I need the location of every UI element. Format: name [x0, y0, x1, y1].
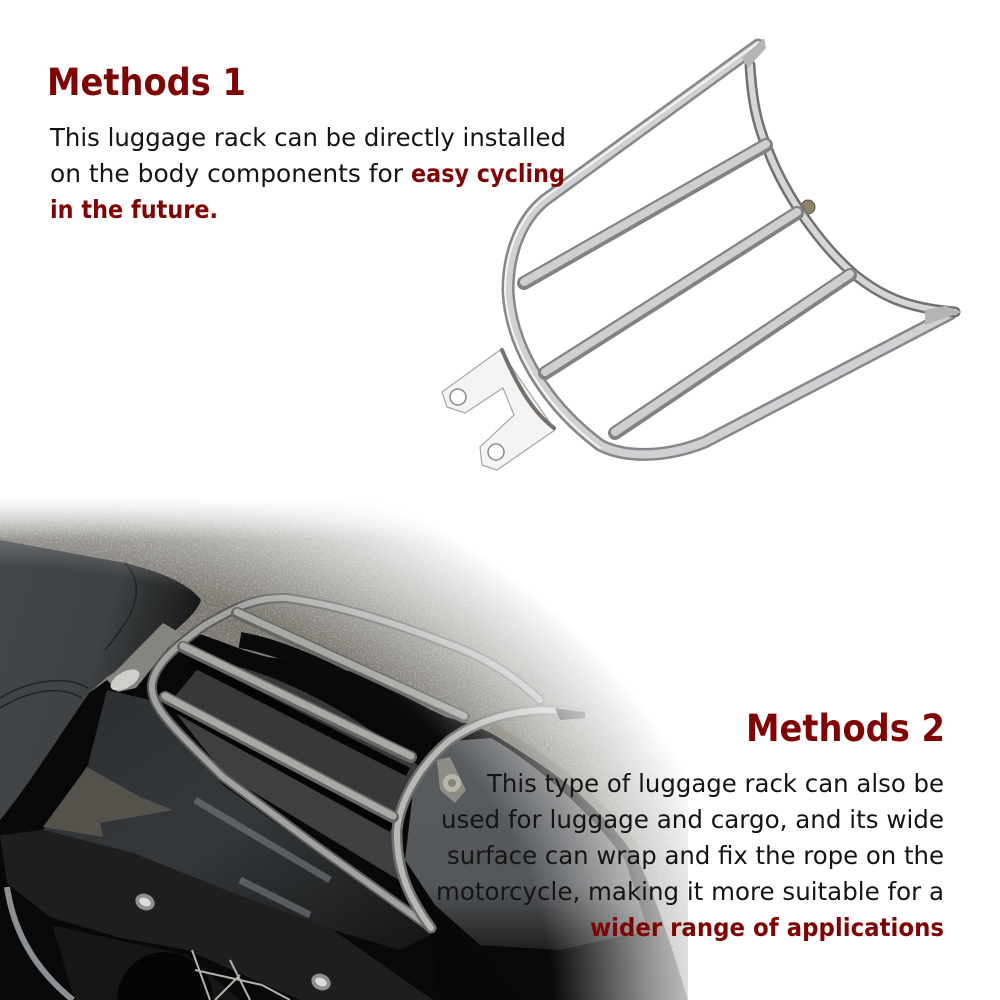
spokes — [192, 950, 290, 1000]
rack mounted on fender — [152, 598, 580, 928]
heading: methods 2: Methods 2 — [746, 707, 945, 750]
gloss between bars — [170, 640, 440, 882]
panel: methods 1 — [47, 61, 566, 224]
product photo: chrome luggage rack — [442, 38, 962, 470]
text block: methods 1 description: on the body components for — [50, 159, 404, 188]
text block: methods 1 description: easy cycling — [411, 159, 565, 188]
black fender — [0, 633, 688, 1000]
road surface — [0, 500, 688, 1000]
white fade over photo — [0, 400, 700, 1000]
text block: methods 1 description: This luggage rack can be directly installed — [49, 123, 566, 152]
rack tail tip — [555, 708, 585, 720]
text block: methods 2 description: used for luggage and cargo, and its wide — [441, 805, 944, 834]
text block: methods 1 description — [49, 123, 566, 224]
streak highlights — [195, 800, 330, 915]
text block: methods 2 description: surface can wrap and fix the rope on the — [447, 841, 944, 870]
outer hoop — [505, 43, 950, 454]
heading: methods 1: Methods 1 — [47, 61, 246, 104]
rack tips — [742, 38, 766, 68]
mounting bolt — [437, 757, 466, 803]
text block: methods 2 description — [436, 769, 944, 942]
gloss right of arc — [405, 738, 648, 950]
bolt — [801, 200, 815, 214]
text block: methods 2 description: motorcycle, making it more suitable for a — [436, 877, 944, 906]
fender rim — [491, 727, 636, 850]
seat — [0, 540, 201, 820]
text block: methods 2 description: wider range of applications — [590, 913, 944, 942]
inner arc — [750, 65, 955, 312]
mounting bracket — [442, 350, 555, 470]
gloss lower fender — [43, 690, 431, 950]
rack mount — [107, 623, 180, 692]
text block: methods 2 description: This type of luggage rack can also be — [486, 769, 944, 798]
hub — [52, 925, 240, 1000]
text block: methods 1 description: in the future. — [50, 195, 218, 224]
bolts — [133, 891, 333, 993]
black strip below rack end — [428, 905, 520, 1000]
tree reflection — [43, 767, 173, 837]
photo: motorcycle rear fender with rack installed — [0, 400, 1000, 1000]
panel: methods 2 — [436, 707, 945, 942]
seat stitching — [0, 563, 136, 708]
cross bars — [524, 144, 850, 433]
lower mudguard panel — [0, 830, 433, 1000]
wheel edge highlight — [7, 887, 73, 1000]
